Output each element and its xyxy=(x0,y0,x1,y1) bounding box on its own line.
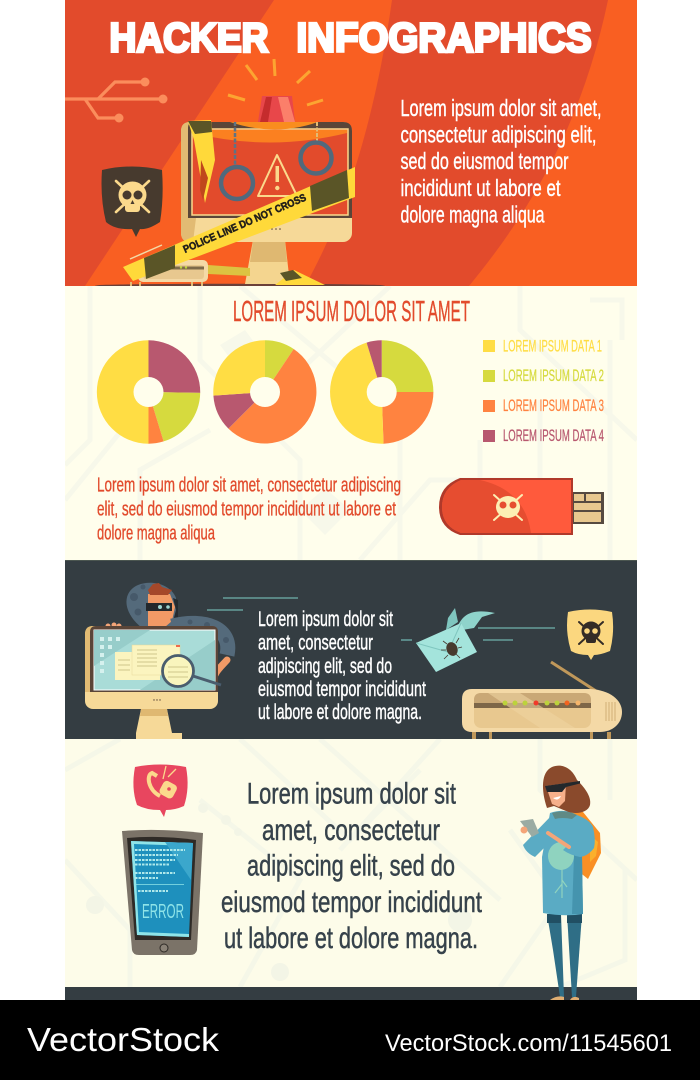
watermark bar xyxy=(0,1000,700,1080)
phone xyxy=(520,819,539,837)
icon: phone with error xyxy=(122,830,203,955)
text block: header copy: consectetur adipiscing elit, xyxy=(400,122,596,148)
icon: bottom tape scraps xyxy=(275,270,325,285)
text block: dark band copy xyxy=(258,608,426,724)
icon: warning triangle xyxy=(258,155,297,196)
icon: hacker woman xyxy=(520,766,601,1000)
text block: header copy: sed do eiusmod tempor xyxy=(400,148,569,174)
legend: LOREM IPSUM DATA 4 xyxy=(503,427,604,445)
icon: hanging police tape xyxy=(188,120,215,203)
icon: alarm siren xyxy=(258,96,295,122)
legend: LOREM IPSUM DATA 1 xyxy=(503,338,602,356)
icon: ground shadow xyxy=(95,284,385,287)
hair xyxy=(543,766,590,813)
face xyxy=(546,783,566,807)
panel: footer strip xyxy=(65,987,637,1000)
icon: hacker monitor xyxy=(85,626,221,739)
text block: chart copy: elit, sed do eiusmod tempor incididunt ut labore et xyxy=(97,498,396,520)
icon: skull bubble xyxy=(102,166,163,237)
legend: LOREM IPSUM DATA 2 xyxy=(503,367,604,385)
icon: usb circuit symbol xyxy=(65,78,168,122)
text block: dark band copy: eiusmod tempor incididunt xyxy=(258,678,426,701)
backpack xyxy=(570,811,601,879)
feet xyxy=(550,996,564,1000)
title: INFOGRAPHICS xyxy=(296,14,592,60)
title: HACKER xyxy=(110,14,268,60)
text block: mobile copy xyxy=(221,778,482,955)
panel: mobile section xyxy=(65,739,637,1000)
icon: broken lock bubble xyxy=(133,764,188,817)
text block: header copy: Lorem ipsum dolor sit amet, xyxy=(400,95,602,121)
dress xyxy=(542,811,583,915)
text block: header copy: incididunt ut labore et xyxy=(400,175,561,201)
icon: router with tape xyxy=(130,245,250,286)
text block: mobile copy: amet, consectetur xyxy=(262,814,440,847)
text block: chart copy xyxy=(97,474,401,544)
text block: mobile copy: adipiscing elit, sed do xyxy=(247,850,455,882)
text block: chart copy: dolore magna aliqua xyxy=(97,522,216,544)
text block: dark band copy: amet, consectetur xyxy=(258,632,373,654)
icon: magnifier xyxy=(162,656,221,686)
watermark bar: VectorStock.com/11545601 xyxy=(385,1030,672,1057)
text block: header copy: dolore magna aliqua xyxy=(400,202,545,228)
icon: monitor with warning xyxy=(181,96,352,284)
icon: phone with error: ERROR xyxy=(142,901,184,923)
text block: mobile copy: ut labore et dolore magna. xyxy=(224,922,478,955)
icon: skull bubble yellow xyxy=(567,610,613,660)
text block: header copy xyxy=(400,95,602,228)
text block: dark band copy: Lorem ipsum dolor sit xyxy=(258,608,393,631)
text block: dark band copy: ut labore et dolore magna. xyxy=(258,701,422,724)
chart: pie 1 xyxy=(97,340,200,444)
icon: handcuffs xyxy=(221,122,332,199)
text block: chart copy: Lorem ipsum dolor sit amet, consectetur adipiscing xyxy=(97,474,401,496)
text block: mobile copy: eiusmod tempor incididunt xyxy=(221,886,482,919)
icon: router xyxy=(462,662,622,739)
icon: flying envelope with bug xyxy=(416,608,495,672)
chart: pie 3 xyxy=(330,340,433,444)
text block: dark band copy: adipiscing elit, sed do xyxy=(258,655,392,678)
panel: dark band xyxy=(65,560,637,739)
icon: police tape xyxy=(123,167,355,281)
panel: header xyxy=(65,0,637,287)
dress print xyxy=(548,842,574,898)
text block: mobile copy: Lorem ipsum dolor sit xyxy=(247,778,456,810)
arms xyxy=(523,815,552,857)
icon: alarm rays xyxy=(228,59,323,105)
icon: police tape: POLICE LINE DO NOT CROSS xyxy=(181,192,308,256)
icon: usb drive xyxy=(439,478,604,535)
legend xyxy=(483,338,604,445)
title xyxy=(110,14,592,60)
legend: LOREM IPSUM DATA 3 xyxy=(503,397,604,415)
watermark bar: VectorStock xyxy=(27,1021,220,1058)
speed lines xyxy=(207,598,555,640)
legs xyxy=(547,914,564,997)
chart: pie 2 xyxy=(213,340,316,444)
icon: hacker xyxy=(106,583,229,684)
panel: charts xyxy=(65,286,637,560)
heading: charts: LOREM IPSUM DOLOR SIT AMET xyxy=(233,296,470,328)
